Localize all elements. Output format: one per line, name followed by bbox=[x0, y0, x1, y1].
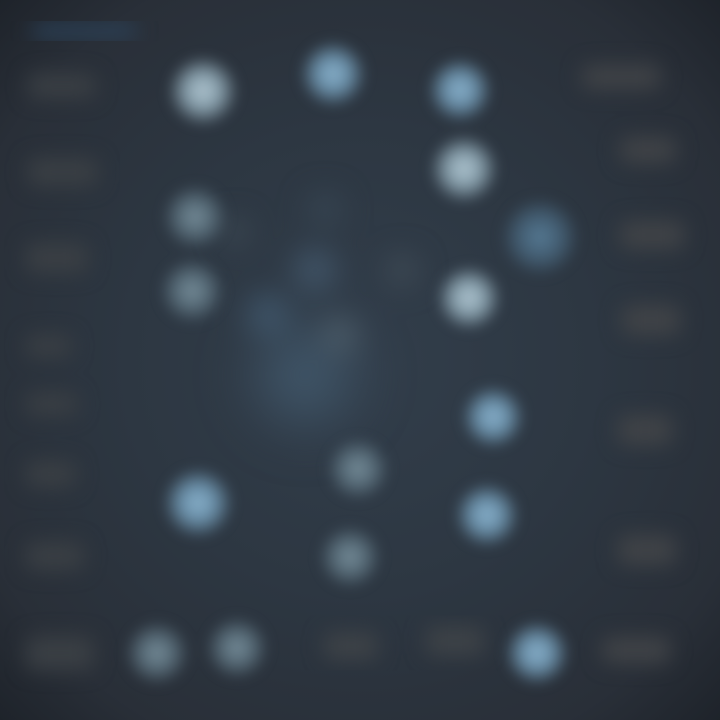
node lower left bbox=[162, 467, 234, 539]
right column labels bbox=[582, 65, 684, 663]
node top right bbox=[427, 57, 493, 123]
left column labels bbox=[26, 74, 98, 670]
node top centre bbox=[299, 40, 367, 108]
node bottom right bbox=[454, 482, 520, 548]
node bottom row one bbox=[124, 620, 190, 686]
node lower centre bbox=[326, 437, 390, 501]
node bottom row two bbox=[205, 616, 269, 680]
node bottom centre bbox=[318, 525, 382, 589]
node lower right bbox=[461, 385, 525, 449]
node bottom row three bbox=[504, 620, 570, 686]
node upper right bbox=[429, 134, 499, 204]
heading placeholder bbox=[32, 25, 137, 37]
network nodes bbox=[124, 40, 580, 686]
node mid left bbox=[159, 258, 225, 324]
node upper left bbox=[162, 184, 228, 250]
node mid right bbox=[436, 265, 502, 331]
central cluster bbox=[221, 192, 418, 421]
node far right bbox=[500, 197, 580, 277]
node top left bbox=[167, 55, 239, 127]
bottom centre labels bbox=[324, 626, 484, 660]
